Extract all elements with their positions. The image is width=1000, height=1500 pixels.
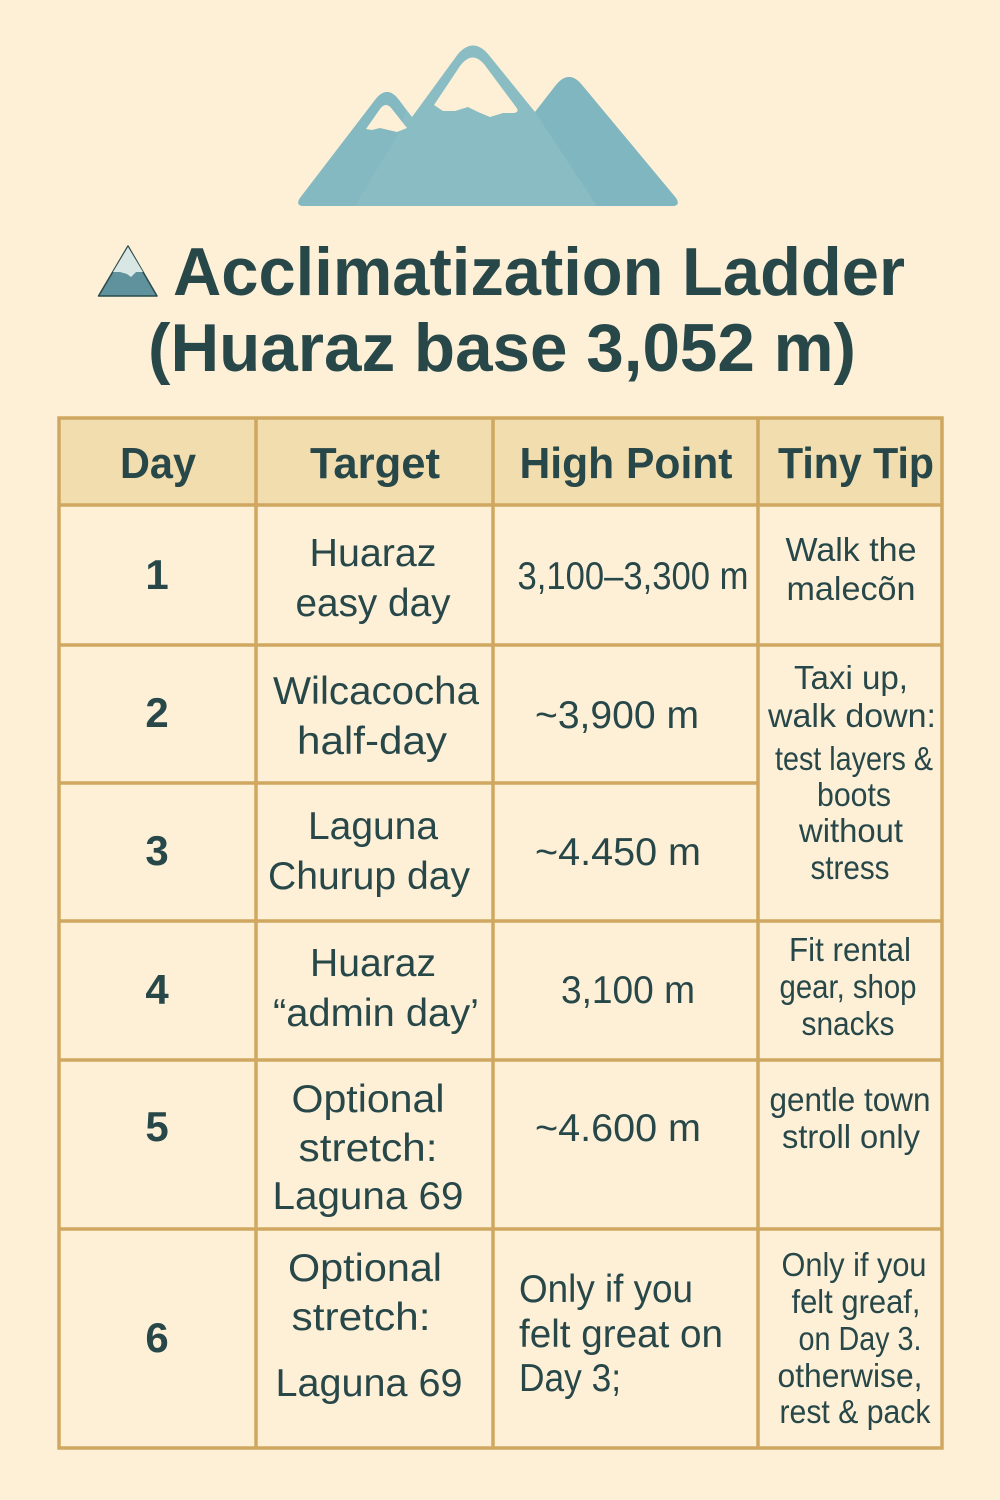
header row [120,439,934,488]
row: day 2: half-day [297,720,448,763]
row: day 6: Optional [288,1247,442,1290]
row: day 3: Laguna [308,805,438,848]
row: day 6: stretch: [292,1296,430,1339]
icon: mountain illustration [298,46,678,206]
row: day 3: Churup day [268,855,470,898]
header row: Tiny Tip [778,439,934,488]
row: day 1: 1 [145,551,169,598]
row: day 6: felt greaf, [792,1283,920,1320]
row: day 1: Huaraz [310,532,436,575]
row: day 4: 3,100 m [561,969,695,1012]
row: day 5: Optional [292,1078,444,1121]
row: day 6: otherwise, [778,1357,922,1394]
row: day 6: 6 [145,1314,169,1361]
merged tip: days 2 and 3 [767,659,936,886]
icon: small mountain in title [98,246,157,296]
row: day 6: Only if you [782,1246,926,1283]
row: day 5: gentle town [770,1081,930,1118]
merged tip: days 2 and 3: test layers & [775,740,933,777]
merged tip: days 2 and 3: Taxi up, [794,659,908,696]
header row: Target [310,439,440,488]
row: day 4: snacks [802,1005,894,1042]
row: day 6 [145,1246,931,1430]
row: day 6: Day 3; [519,1357,621,1400]
row: day 1 [145,531,916,625]
row: day 6: on Day 3. [798,1320,922,1357]
row: day 6: Only if you [519,1268,693,1311]
table: acclimatization ladder [59,418,942,1448]
row: day 6: rest & pack [780,1393,931,1430]
merged tip: days 2 and 3: without [798,812,903,849]
title: (Huaraz base 3,052 m) [148,310,856,386]
row: day 3: 3 [145,827,169,874]
row: day 4 [145,931,916,1042]
row: day 4: gear, shop [780,968,916,1005]
table grid [59,418,942,1448]
row: day 1: easy day [296,582,451,625]
row: day 2: Wilcacocha [273,670,479,713]
row: day 6: felt great on [519,1313,723,1356]
title [148,234,905,386]
row: day 4: “admin day’ [273,992,479,1035]
row: day 5: 5 [145,1103,169,1150]
row: day 3: ~4.450 m [535,831,701,874]
row: day 5 [145,1078,930,1218]
row: day 5: stretch: [298,1127,438,1170]
header row: Day [120,439,196,488]
row: day 4: Huaraz [310,942,436,985]
row: day 1: malecõn [786,570,916,607]
row: day 5: ~4.600 m [535,1107,701,1150]
row: day 6: Laguna 69 [276,1362,462,1405]
row: day 1: 3,100–3,300 m [518,555,748,598]
row: day 2: ~3,900 m [535,694,699,737]
merged tip: days 2 and 3: walk down: [767,697,936,734]
table header band [59,418,942,505]
row: day 4: 4 [145,966,169,1013]
row: day 2: 2 [145,689,169,736]
header row: High Point [520,439,733,488]
row: day 2 [145,670,699,763]
merged tip: days 2 and 3: stress [810,849,890,886]
row: day 4: Fit rental [789,931,911,968]
row: day 1: Walk the [786,531,916,568]
row: day 5: stroll only [782,1118,920,1155]
merged tip: days 2 and 3: boots [817,776,891,813]
title: Acclimatization Ladder [173,234,905,310]
row: day 3 [145,805,701,898]
row: day 5: Laguna 69 [272,1175,464,1218]
